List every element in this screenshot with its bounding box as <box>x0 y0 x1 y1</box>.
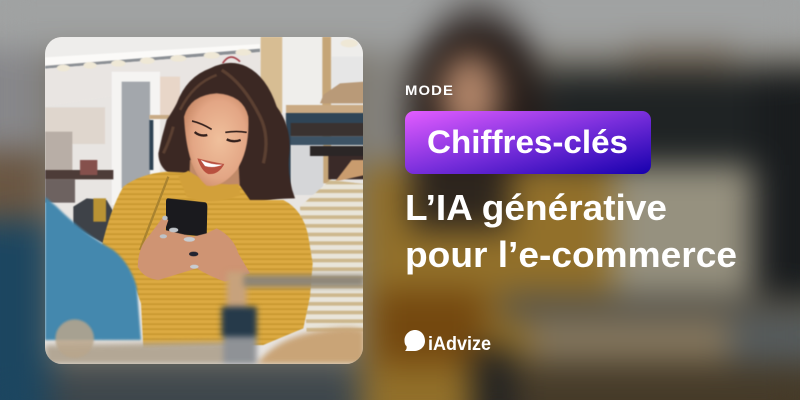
photo: woman looking at her phone in a clothing store <box>45 37 365 364</box>
striped shirt <box>300 180 365 333</box>
neck <box>188 160 240 186</box>
title: L’IA générative <box>405 187 667 228</box>
logo: iAdvize <box>404 330 491 355</box>
blurred light spot <box>55 319 94 358</box>
face <box>184 93 249 186</box>
hair highlights <box>163 70 266 163</box>
hands <box>138 217 250 282</box>
wooden column and shelves <box>149 37 365 195</box>
smile <box>197 158 224 174</box>
eyes and brows <box>192 121 247 141</box>
fingernails <box>160 216 199 269</box>
sweater collar <box>180 170 240 198</box>
foreground blurred rail <box>45 272 365 364</box>
store ceiling <box>45 37 363 71</box>
hair <box>158 63 295 215</box>
logo: iAdvize: iAdvize <box>428 334 491 355</box>
title <box>405 187 737 275</box>
category label: MODE <box>405 83 454 98</box>
badge: Chiffres-clés <box>405 111 651 174</box>
wall panel and left rail <box>45 107 113 243</box>
phone <box>166 198 207 237</box>
store door <box>112 72 180 205</box>
title: pour l’e-commerce <box>405 234 737 275</box>
blue jacket foreground <box>45 197 141 340</box>
sweater <box>102 172 313 348</box>
icon: speech bubble <box>404 330 425 351</box>
badge: Chiffres-clés: Chiffres-clés <box>427 124 628 160</box>
bag strap <box>140 177 168 250</box>
